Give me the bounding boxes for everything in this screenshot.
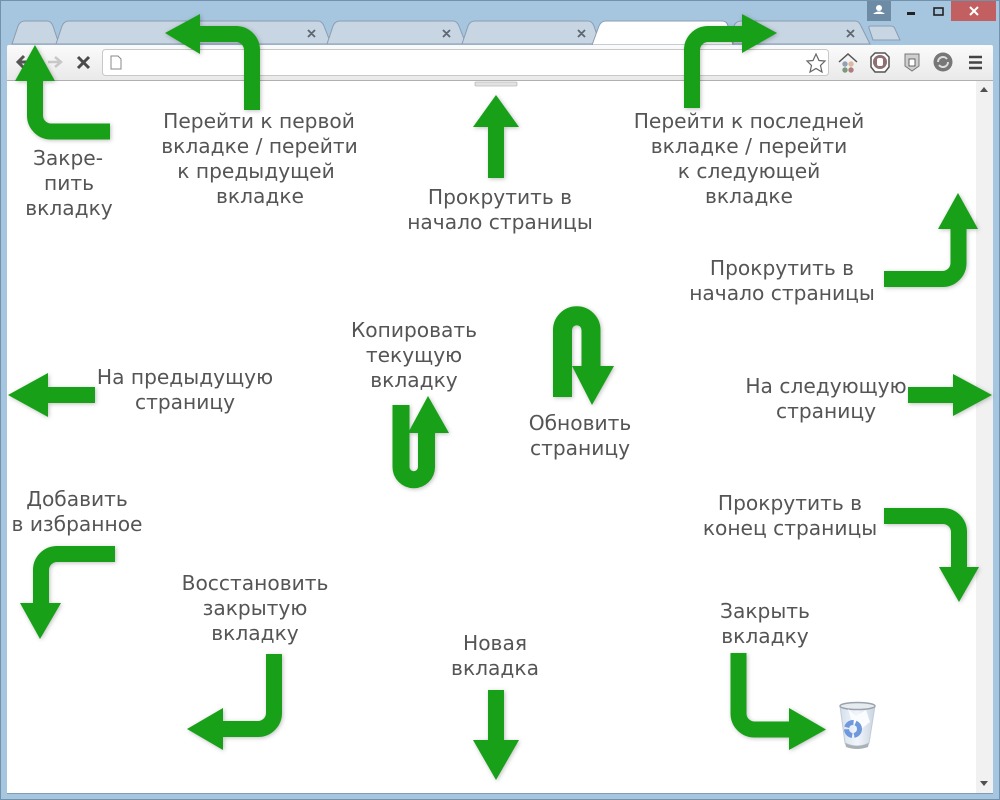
- label: restore tab: [182, 571, 328, 645]
- label: duplicate tab: вкладку: [370, 368, 458, 392]
- icon: star: [807, 54, 825, 72]
- label: first tab: к предыдущей: [177, 159, 335, 183]
- label: restore tab: закрытую: [203, 596, 307, 620]
- label: add to favourites: Добавить: [26, 487, 128, 511]
- label: scroll to top right: начало страницы: [689, 281, 875, 305]
- icon: shield: [905, 54, 919, 71]
- label: back: страницу: [135, 390, 235, 414]
- label: forward: [745, 374, 907, 423]
- arrow: pin tab: [15, 45, 110, 132]
- label: scroll to top center: Прокрутить в: [428, 185, 572, 209]
- label: pin tab: пить: [44, 171, 94, 195]
- label: last tab: [634, 109, 864, 208]
- label: restore tab: вкладку: [211, 621, 299, 645]
- label: pin tab: вкладку: [25, 196, 113, 220]
- icon: stop loading: [78, 57, 89, 68]
- label: last tab: вкладке: [705, 184, 793, 208]
- label: scroll to top center: начало страницы: [407, 210, 593, 234]
- label: add to favourites: [12, 487, 142, 536]
- arrow: last tab: [692, 14, 777, 108]
- arrow: restore tab: [187, 654, 274, 750]
- arrow: scroll to top center: [473, 95, 519, 178]
- icon: scroll-top indicator bar: [475, 82, 517, 86]
- label: duplicate tab: [351, 318, 477, 392]
- label: new tab: Новая: [463, 631, 527, 655]
- label: close tab: вкладку: [721, 624, 809, 648]
- label: last tab: Перейти к последней: [634, 109, 864, 133]
- label: add to favourites: в избранное: [12, 512, 142, 536]
- arrow: back: [8, 373, 95, 417]
- label: forward: страницу: [776, 399, 876, 423]
- label: duplicate tab: Копировать: [351, 318, 477, 342]
- icon: back: [18, 56, 29, 68]
- icon: forward: [48, 57, 61, 67]
- icon: recycle bin: [840, 702, 875, 749]
- arrow: scroll to top right: [884, 193, 978, 279]
- icon: stop sign: [871, 53, 889, 72]
- label: scroll to top right: Прокрутить в: [710, 256, 854, 280]
- label: refresh: Обновить: [529, 411, 631, 435]
- tab strip: [12, 21, 900, 45]
- label: new tab: вкладка: [451, 656, 539, 680]
- label: first tab: Перейти к первой: [163, 109, 355, 133]
- label: refresh: страницу: [530, 436, 630, 460]
- label: last tab: к следующей: [678, 159, 820, 183]
- label: scroll to bottom: [703, 491, 877, 540]
- icon: menu: [969, 57, 982, 68]
- label: first tab: вкладке: [216, 184, 304, 208]
- icon: sync: [934, 52, 952, 72]
- label: pin tab: Закре-: [33, 146, 103, 170]
- label: duplicate tab: текущую: [366, 343, 462, 367]
- arrow: first tab: [165, 14, 252, 110]
- arrow: forward: [908, 374, 992, 416]
- icon: page: [111, 56, 121, 69]
- toolbar: [7, 45, 993, 81]
- label: refresh: [529, 411, 631, 460]
- label: close tab: Закрыть: [720, 599, 810, 623]
- label: pin tab: [25, 146, 113, 220]
- arrow: duplicate tab: [401, 396, 449, 480]
- label: last tab: вкладке / перейти: [651, 134, 847, 158]
- label: scroll to bottom: конец страницы: [703, 516, 877, 540]
- arrow: add to favourites: [20, 554, 115, 639]
- label: first tab: вкладке / перейти: [161, 134, 358, 158]
- label: scroll to top center: [407, 185, 593, 234]
- label: first tab: [161, 109, 358, 208]
- arrow: refresh: [562, 316, 614, 405]
- label: restore tab: Восстановить: [182, 571, 328, 595]
- window controls: [867, 1, 996, 21]
- label: forward: На следующую: [745, 374, 907, 398]
- label: back: [97, 365, 273, 414]
- scrollbar: [976, 81, 993, 793]
- arrow: scroll to bottom: [884, 516, 979, 602]
- label: scroll to bottom: Прокрутить в: [718, 491, 862, 515]
- arrow: close tab: [738, 653, 826, 750]
- icon: home tiles: [839, 54, 857, 73]
- label: new tab: [451, 631, 539, 680]
- label: scroll to top right: [689, 256, 875, 305]
- label: close tab: [720, 599, 810, 648]
- arrow: new tab: [473, 690, 519, 780]
- label: back: На предыдущую: [97, 365, 273, 389]
